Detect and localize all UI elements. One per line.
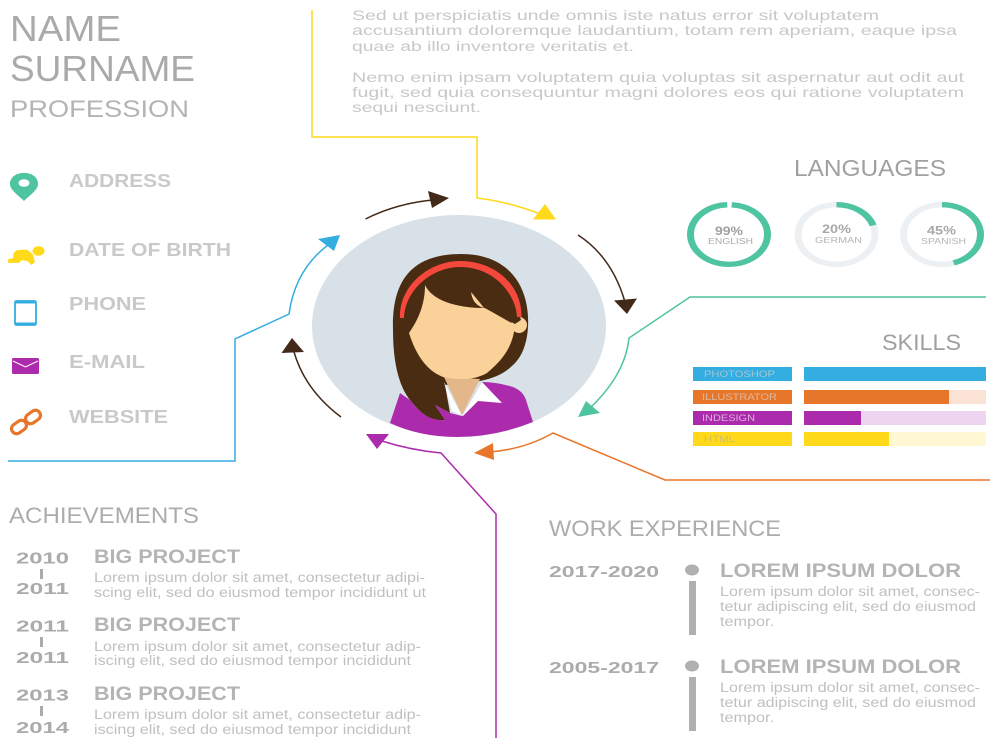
background ellipse: [312, 215, 606, 437]
skill row: illustrator: [693, 390, 986, 404]
entry: 2013-2014: [16, 684, 421, 737]
heading: name and profession: [10, 8, 195, 123]
entry: 2011-2011: [16, 615, 421, 668]
entry: 2010-2011: BIG PROJECT: [94, 547, 240, 568]
entry: 2005-2017: Lorem ipsum dolor sit amet, consec-: [720, 680, 980, 695]
entry: 2011-2011: 2011: [16, 618, 69, 636]
text block: introduction: [352, 7, 964, 115]
skill row: illustrator: ILLUSTRATOR: [702, 392, 778, 402]
skill row: photoshop: PHOTOSHOP: [704, 369, 775, 379]
skill row: photoshop: [693, 367, 986, 381]
panel: skills: [693, 330, 986, 446]
heading: name and profession: NAME: [10, 8, 121, 49]
donut: english 99%: [688, 203, 770, 266]
label: phone: PHONE: [69, 294, 146, 314]
text block: introduction: quae ab illo inventore veritatis et.: [352, 38, 634, 54]
icon: location pin: [10, 173, 38, 201]
photo circle with portrait: [312, 215, 606, 437]
entry: 2017-2020: tempor.: [720, 614, 774, 629]
arrow: teal: [578, 297, 986, 417]
skill row: html: HTML: [704, 434, 735, 444]
donut: german 20%: 20%: [822, 222, 851, 236]
donut: german 20%: [798, 205, 875, 264]
entry: 2013-2014: iscing elit, sed do eiusmod tempor incididunt: [94, 722, 411, 737]
entry: 2010-2011: [16, 547, 426, 600]
portrait: fringe slit: [471, 292, 484, 308]
icon: crawling baby: [8, 247, 44, 264]
panel: achievements: [9, 503, 426, 737]
entry: 2013-2014: 2014: [16, 720, 69, 737]
entry: 2013-2014: BIG PROJECT: [94, 684, 240, 705]
portrait: collar: [444, 382, 502, 416]
skill row: indesign: INDESIGN: [702, 413, 755, 423]
entry: 2017-2020: LOREM IPSUM DOLOR: [720, 561, 961, 582]
heading: name and profession: PROFESSION: [10, 96, 189, 123]
arrow: blue: [8, 235, 340, 461]
entry: 2005-2017: LOREM IPSUM DOLOR: [720, 657, 961, 678]
arrow: orange: [474, 433, 990, 480]
donut: spanish 45%: SPANISH: [921, 237, 966, 246]
panel: languages: [688, 155, 980, 266]
entry: 2011-2011: Lorem ipsum dolor sit amet, consectetur adip-: [94, 639, 421, 654]
entry: 2011-2011: iscing elit, sed do eiusmod tempor incididunt: [94, 653, 411, 668]
portrait: face: [409, 285, 515, 379]
label: date of birth: DATE OF BIRTH: [69, 240, 231, 260]
arrow: dark top: [366, 191, 449, 219]
heading: name and profession: SURNAME: [10, 48, 195, 89]
icon: tablet: [15, 301, 36, 325]
donut: spanish 45%: [904, 205, 980, 264]
label: e-mail: E-MAIL: [69, 352, 145, 372]
text block: introduction: accusantium doloremque laudantium, totam rem aperiam, eaque ipsa: [352, 22, 957, 38]
arrow: purple: [366, 434, 496, 738]
entry: 2017-2020: 2017-2020: [549, 564, 659, 581]
donut: english 99%: ENGLISH: [708, 237, 753, 246]
entry: 2013-2014: Lorem ipsum dolor sit amet, consectetur adip-: [94, 707, 421, 722]
portrait: sweater: [390, 382, 533, 437]
entry: 2013-2014: 2013: [16, 688, 69, 704]
entry: 2005-2017: tempor.: [720, 710, 774, 725]
arrow: dark left: [282, 338, 341, 417]
entry: 2011-2011: BIG PROJECT: [94, 615, 240, 636]
donut: english 99%: 99%: [715, 224, 743, 238]
arrow: yellow: [312, 10, 556, 220]
portrait: neck: [444, 377, 480, 415]
text block: introduction: Nemo enim ipsam voluptatem quia voluptas sit aspernatur aut odit aut: [352, 69, 964, 85]
heading: achievements: ACHIEVEMENTS: [9, 503, 199, 528]
entry: 2005-2017: tetur adipiscing elit, sed do eiusmod: [720, 695, 976, 710]
panel: contact list: [8, 171, 231, 436]
text block: introduction: sequi nesciunt.: [352, 99, 481, 115]
label: website: WEBSITE: [69, 407, 168, 427]
label: address: ADDRESS: [69, 171, 171, 191]
panel: work experience: [549, 516, 980, 731]
icon: chain link: [10, 408, 42, 436]
heading: languages: LANGUAGES: [794, 155, 946, 181]
portrait: hair back: [393, 254, 528, 420]
skill row: indesign: [693, 411, 986, 425]
entry: 2017-2020: Lorem ipsum dolor sit amet, consec-: [720, 584, 980, 599]
portrait: headband: [400, 261, 522, 318]
donut: spanish 45%: 45%: [927, 224, 956, 238]
entry: 2010-2011: 2011: [16, 581, 69, 598]
skill row: html: [693, 432, 986, 446]
entry: 2010-2011: Lorem ipsum dolor sit amet, consectetur adipi-: [94, 570, 425, 585]
heading: skills: SKILLS: [882, 330, 961, 355]
portrait: ear: [511, 317, 527, 333]
entry: 2010-2011: 2010: [16, 550, 69, 568]
entry: 2005-2017: [549, 657, 980, 731]
icon: envelope: [12, 358, 39, 374]
entry: 2010-2011: scing elit, sed do eiusmod tempor incididunt ut: [94, 585, 426, 600]
entry: 2011-2011: 2011: [16, 650, 69, 667]
portrait: fringe: [425, 270, 521, 324]
text block: introduction: fugit, sed quia consequuntur magni dolores eos qui ratione voluptatem: [352, 84, 964, 100]
heading: work experience: WORK EXPERIENCE: [549, 516, 781, 541]
entry: 2017-2020: [549, 561, 980, 635]
entry: 2005-2017: 2005-2017: [549, 660, 659, 677]
text block: introduction: Sed ut perspiciatis unde omnis iste natus error sit voluptatem: [352, 7, 879, 23]
arrow: dark right: [578, 235, 637, 314]
entry: 2017-2020: tetur adipiscing elit, sed do eiusmod: [720, 599, 976, 614]
donut: german 20%: GERMAN: [815, 236, 862, 245]
